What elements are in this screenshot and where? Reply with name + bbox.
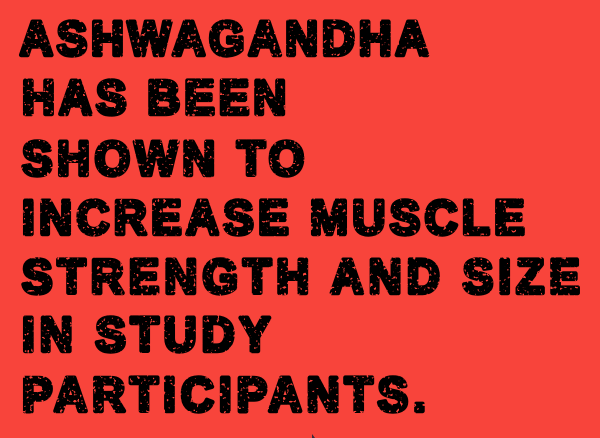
headline line 7: PARTICIPANTS. — [22, 368, 426, 421]
headline line 2: HAS BEEN — [22, 71, 286, 124]
headline line 5: STRENGTH AND SIZE — [22, 250, 580, 303]
headline line 1: ASHWAGANDHA — [20, 12, 428, 65]
headline line 3: SHOWN TO — [22, 132, 304, 185]
small mark at bottom edge — [312, 434, 315, 438]
headline line 4: INCREASE MUSCLE — [22, 191, 525, 244]
headline line 6: IN STUDY — [22, 308, 270, 361]
